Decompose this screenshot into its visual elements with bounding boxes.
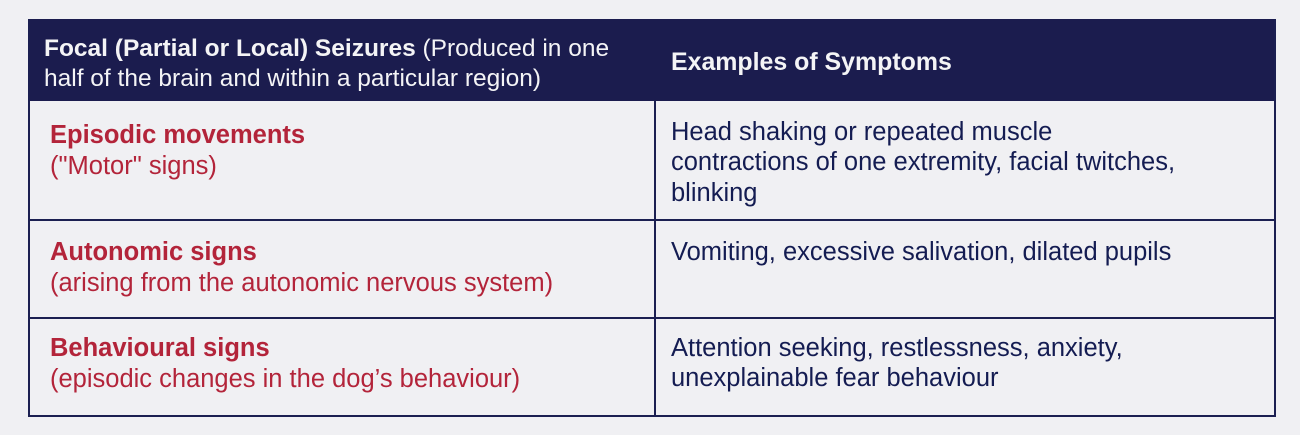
table header band bbox=[28, 19, 1276, 101]
row 1 label: episodic movements: ("Motor" signs) bbox=[50, 152, 217, 180]
row 1 symptoms: contractions of one extremity, facial twitches, bbox=[671, 148, 1175, 176]
row 1 symptoms: Head shaking or repeated muscle bbox=[671, 118, 1052, 146]
row 3 symptoms bbox=[671, 334, 1123, 392]
row 3 symptoms: Attention seeking, restlessness, anxiety, bbox=[671, 334, 1123, 362]
row 1 symptoms: blinking bbox=[671, 179, 757, 207]
row 1 symptoms bbox=[671, 118, 1175, 207]
row 2 label: autonomic signs: Autonomic signs bbox=[50, 238, 257, 266]
row 1 label: episodic movements bbox=[50, 121, 305, 180]
row 2 label: autonomic signs bbox=[50, 238, 553, 296]
row 3 symptoms: unexplainable fear behaviour bbox=[671, 364, 998, 392]
row 1 label: episodic movements: Episodic movements bbox=[50, 121, 305, 149]
header: focal seizures: half of the brain and within a particular region) bbox=[44, 64, 541, 92]
header: examples of symptoms: Examples of Symptoms bbox=[671, 48, 952, 76]
row 2 label: autonomic signs: (arising from the autonomic nervous system) bbox=[50, 268, 553, 296]
header: focal seizures bbox=[44, 35, 609, 92]
row 3 label: behavioural signs bbox=[50, 334, 520, 392]
row 3 label: behavioural signs: Behavioural signs bbox=[50, 334, 270, 362]
row 2 symptoms: Vomiting, excessive salivation, dilated pupils bbox=[671, 238, 1171, 266]
row 3 label: behavioural signs: (episodic changes in the dog’s behaviour) bbox=[50, 364, 520, 392]
header: focal seizures: Focal (Partial or Local) Seizures (Produced in one bbox=[44, 35, 609, 62]
